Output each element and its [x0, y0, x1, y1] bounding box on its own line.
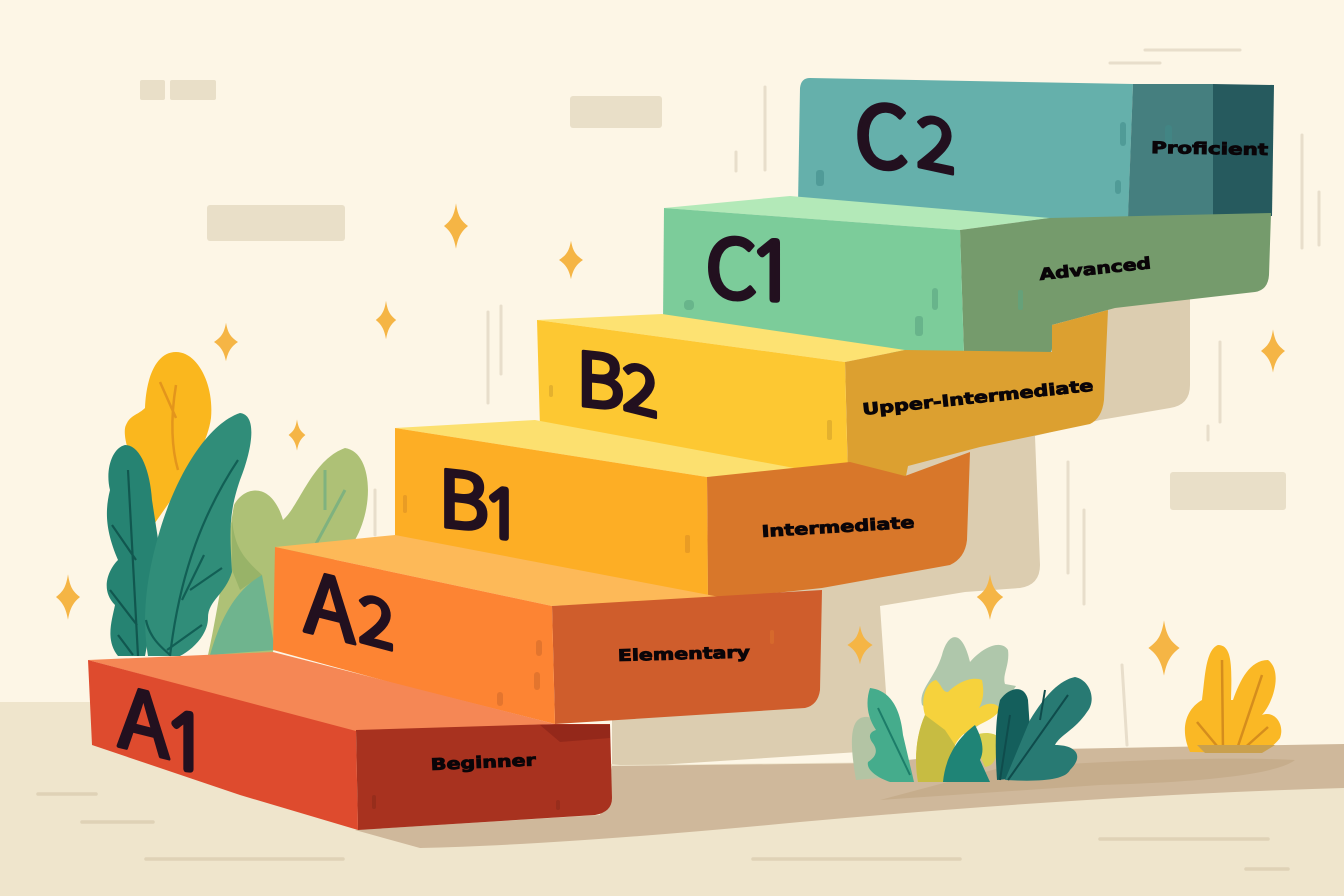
yellow leaf	[125, 352, 211, 530]
level label C2: 2	[916, 83, 956, 195]
brick marks	[549, 385, 832, 440]
level name Upper-Intermediate: Upper-Intermediate	[861, 376, 1094, 419]
step C1	[663, 196, 1271, 356]
level label B2: 2	[622, 333, 659, 438]
level label B1: 1	[482, 479, 522, 549]
level name Proficient: Proficient	[1151, 138, 1269, 159]
level label C2	[854, 66, 956, 195]
level label A2	[304, 534, 395, 670]
front face	[798, 78, 1133, 222]
step B1	[395, 420, 970, 604]
level label C1	[705, 202, 796, 324]
front face	[273, 547, 555, 724]
side face	[356, 724, 612, 830]
level name Advanced: Advanced	[1038, 253, 1152, 284]
side face	[845, 310, 1108, 478]
level label B1: B	[438, 435, 489, 554]
step A1	[88, 649, 612, 830]
front face	[395, 428, 708, 604]
level label C1: 1	[748, 231, 796, 313]
level name Beginner: Beginner	[430, 750, 536, 774]
staircase wall shadow	[612, 296, 1190, 768]
top face	[275, 535, 725, 606]
wall bricks	[140, 80, 1286, 510]
dark teal leaf	[996, 689, 1030, 780]
teal right leaf	[145, 413, 251, 656]
level label B2: B	[576, 320, 625, 432]
teal right leaf	[1005, 677, 1092, 781]
side face	[960, 213, 1271, 356]
level label A2: 2	[358, 565, 395, 670]
teal left leaf	[107, 445, 162, 656]
light green leaves	[208, 448, 368, 655]
top face	[664, 196, 1050, 230]
wall streaks	[375, 50, 1319, 745]
level label C1: C	[705, 202, 757, 324]
level label A1	[118, 649, 209, 783]
top face	[395, 420, 805, 477]
brick marks	[816, 122, 1172, 194]
top face	[537, 314, 905, 362]
plant: right yellow	[1185, 645, 1281, 753]
sparkles	[56, 203, 1285, 676]
step A2	[273, 534, 822, 724]
level label A1: 1	[163, 703, 209, 782]
side face	[552, 590, 822, 724]
level name Intermediate: Intermediate	[761, 513, 915, 541]
front face	[537, 320, 848, 482]
green leaf	[868, 688, 914, 782]
floor	[0, 702, 1344, 896]
side face	[707, 452, 970, 600]
dark side face	[1213, 84, 1274, 216]
level label B2	[576, 320, 659, 438]
side face	[1128, 84, 1213, 218]
front face	[663, 208, 964, 356]
plant: centre bush	[852, 637, 1092, 782]
brick marks	[497, 630, 774, 706]
level label C2: C	[854, 66, 909, 195]
pale back leaves	[921, 637, 1016, 735]
step C2	[798, 66, 1274, 222]
brick marks	[403, 495, 690, 553]
plant: left cluster	[107, 352, 368, 656]
brick marks	[340, 795, 560, 810]
floor shadow	[355, 744, 1344, 848]
front face	[88, 660, 358, 830]
top face	[88, 652, 555, 732]
level label A1: A	[118, 649, 169, 783]
level label A2: A	[304, 534, 355, 668]
yellow leaves	[916, 679, 1000, 782]
mid teal leaf	[943, 725, 990, 782]
brick marks	[684, 288, 1023, 336]
level name Elementary: Elementary	[618, 643, 751, 665]
cast shadow from step A2	[540, 725, 610, 742]
step B2	[537, 310, 1108, 482]
floor streaks	[38, 794, 1288, 869]
level label B1	[438, 435, 522, 554]
